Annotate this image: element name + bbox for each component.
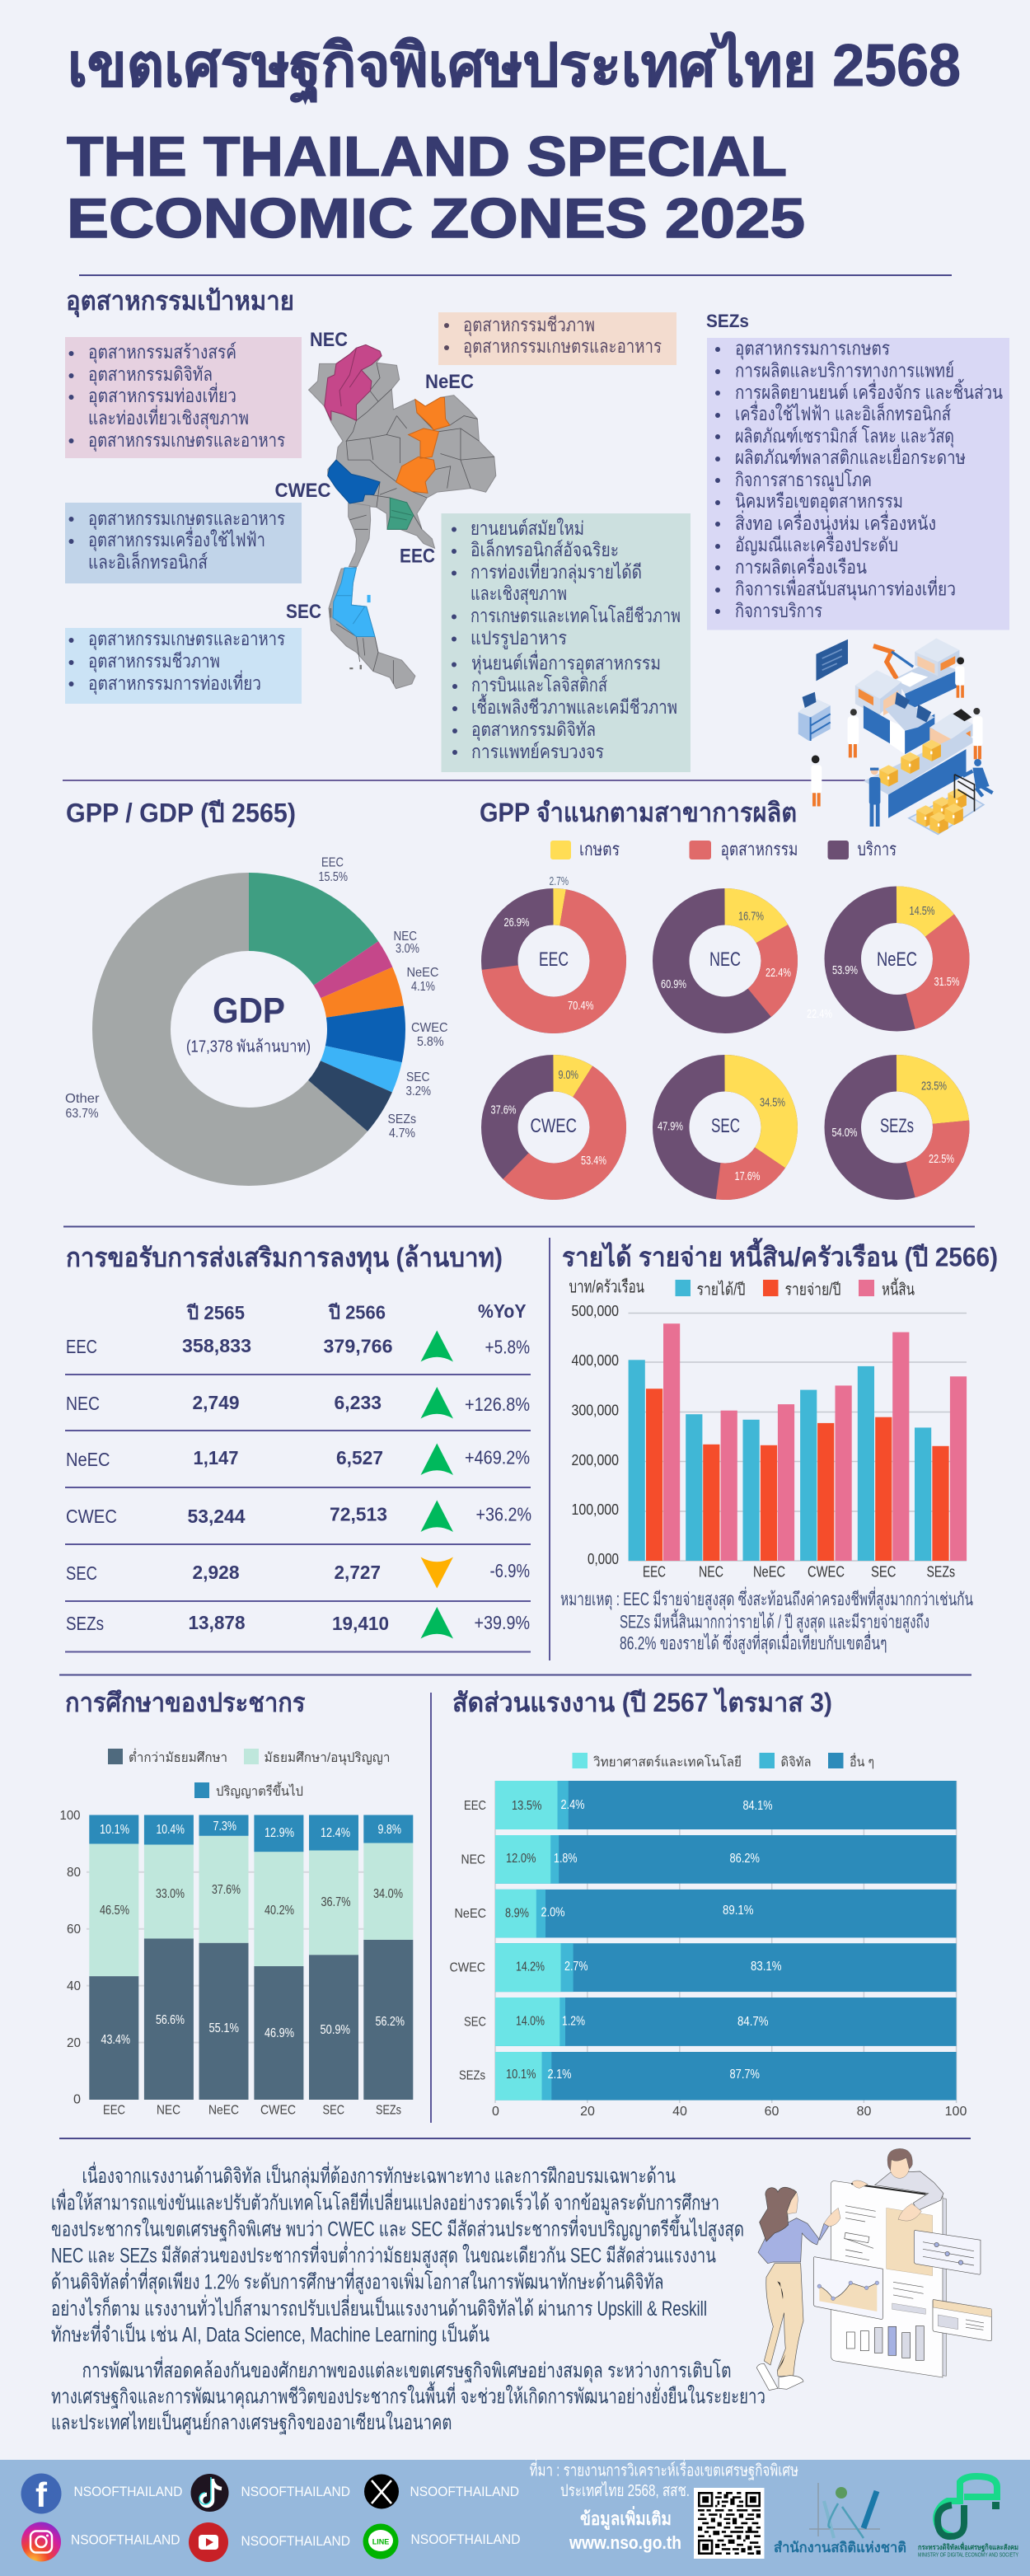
text block: analysis: เนื่องจากแรงงานด้านดิจิทัล เป็นกลุ่มที่ต้องการทักษะเฉพาะทาง และการฝึกอบรมเฉพาะด้าน <box>82 2161 676 2189</box>
chart: household income expense debt: SEC <box>871 1564 897 1581</box>
social label: NSOOFTHAILAND <box>410 2532 521 2547</box>
row: CWEC: CWEC <box>66 1506 117 1527</box>
panel: CWEC industries: อุตสาหกรรมเกษตรและอาหาร <box>88 508 285 530</box>
title: English <box>67 125 805 250</box>
row: SEZs <box>66 1607 530 1638</box>
chart: GDP share donut: Other <box>65 1092 100 1106</box>
chart: education stacked columns: 0 <box>73 2093 81 2106</box>
chart: education stacked columns: 56.6% <box>156 2013 185 2027</box>
chart: EEC sector donut <box>499 874 608 1015</box>
row: NEC: +126.8% <box>465 1393 530 1415</box>
chart: labour share stacked bars: 14.2% <box>516 1960 545 1974</box>
chart: GDP share donut: (17,378 พันล้านบาท) <box>186 1038 311 1056</box>
panel: NEC industries: และท่องเที่ยวเชิงสุขภาพ <box>88 405 249 429</box>
text block: analysis: NEC และ SEZs มีสัดส่วนของประชากรที่จบต่ำกว่ามัธยมสูงสุด ในขณะเดียวกัน SEC มีสัดส่วนแรงงาน <box>51 2241 716 2268</box>
figure: man <box>851 2148 943 2221</box>
chart: labour share stacked bars: CWEC <box>450 1961 485 1974</box>
chart: education stacked columns: NEC <box>157 2103 180 2118</box>
social label: NSOOFTHAILAND <box>410 2484 519 2499</box>
row: SEC: SEC <box>66 1562 97 1584</box>
legend: sectors: อุตสาหกรรม <box>720 839 798 860</box>
chart: education stacked columns: 12.9% <box>265 1826 294 1840</box>
source and more info: ที่มา : รายงานการวิเคราะห์เรื่องเขตเศรษฐกิจพิเศษ <box>529 2459 798 2480</box>
chart: household income expense debt: 500,000 <box>572 1303 619 1319</box>
chart: CWEC sector donut: 9.0% <box>559 1068 578 1082</box>
panel: NEC industries: อุตสาหกรรมเกษตรและอาหาร <box>88 429 285 452</box>
text block: analysis <box>51 2161 765 2435</box>
chart: EEC sector donut: 26.9% <box>504 916 529 930</box>
title: English: ECONOMIC ZONES 2025 <box>67 187 805 250</box>
panel: EEC industries: การท่องเที่ยวกลุ่มรายได้ดี <box>471 559 642 583</box>
row: SEC: 2,727 <box>335 1562 381 1583</box>
heading: education: การศึกษาของประชากร <box>65 1688 305 1717</box>
chart: SEZs sector donut: 23.5% <box>921 1080 947 1093</box>
heading: GPP by sector: GPP จำแนกตามสาขาการผลิต <box>480 798 797 827</box>
panel: SEC industries: อุตสาหกรรมการท่องเที่ยว <box>88 670 261 695</box>
logo: Ministry of Digital Economy and Society <box>918 2476 1018 2558</box>
panel: SEZs industries: สิ่งทอ เครื่องนุ่งห่ม เครื่องหนัง <box>735 510 936 535</box>
chart: labour share stacked bars: 1.2% <box>562 2014 585 2029</box>
chart: GDP share donut: 4.1% <box>411 980 435 994</box>
row: SEC: -6.9% <box>489 1560 530 1581</box>
chart: GDP share donut: 3.0% <box>396 942 419 956</box>
social label: NSOOFTHAILAND <box>71 2532 180 2548</box>
panel: SEC industries: อุตสาหกรรมชีวภาพ <box>88 650 220 672</box>
chart: education stacked columns: CWEC <box>260 2103 296 2118</box>
row: CWEC: 72,513 <box>330 1503 387 1525</box>
row: NEC: NEC <box>66 1393 100 1414</box>
row: SEZs: SEZs <box>66 1613 104 1634</box>
chart: GDP share donut <box>65 855 448 1147</box>
panel: SEZs industries <box>707 338 1009 630</box>
note: household finance <box>560 1586 973 1655</box>
chart: labour share stacked bars: 2.1% <box>547 2068 572 2082</box>
map labels <box>275 329 474 623</box>
row: SEC <box>66 1557 530 1589</box>
chart: CWEC sector donut: 37.6% <box>491 1103 516 1117</box>
chart: labour share stacked bars: 13.5% <box>512 1799 542 1813</box>
table: investment promotion: ปี 2565 <box>185 1302 245 1323</box>
chart: GDP share donut: SEZs <box>387 1112 416 1126</box>
title: Thai: เขตเศรษฐกิจพิเศษประเทศไทย 2568 <box>68 30 961 104</box>
illustration: cart of boxes <box>909 775 984 834</box>
panel: SEZs industries: เครื่องใช้ไฟฟ้า และอิเล็กทรอนิกส์ <box>735 400 951 424</box>
chart: education stacked columns: 40.2% <box>265 1904 294 1918</box>
chart: labour share stacked bars: 1.8% <box>554 1852 577 1866</box>
chart: SEC sector donut <box>658 1073 785 1183</box>
chart: EEC sector donut: 2.7% <box>549 874 569 888</box>
chart: NeEC sector donut: 53.9% <box>832 963 858 977</box>
source and more info: ประเทศไทย 2568, สสช. <box>560 2481 690 2500</box>
panel: SEZs industries: อัญมณีและเครื่องประดับ <box>735 532 898 555</box>
heading: investment promotion: การขอรับการส่งเสริมการลงทุน (ล้านบาท) <box>66 1243 503 1275</box>
row: EEC: EEC <box>66 1336 97 1357</box>
chart: household income expense debt: SEZs <box>926 1564 955 1581</box>
text block: analysis: และประเทศไทยเป็นศูนย์กลางเศรษฐกิจของอาเซียนในอนาคต <box>51 2410 452 2435</box>
chart: GDP share donut: 3.2% <box>405 1084 431 1098</box>
heading: target industries: อุตสาหกรรมเป้าหมาย <box>66 286 294 318</box>
row: NeEC: 6,527 <box>336 1447 383 1468</box>
panel: NEC industries <box>65 337 302 458</box>
chart: SEC sector donut: 34.5% <box>760 1096 785 1109</box>
row: CWEC: 53,244 <box>188 1506 246 1527</box>
chart: CWEC sector donut: CWEC <box>531 1115 577 1137</box>
chart: education stacked columns: 7.3% <box>213 1820 236 1834</box>
legend: education: ปริญญาตรีขึ้นไป <box>216 1782 303 1799</box>
chart: household income expense debt: บาท/ครัวเรือน <box>569 1277 644 1297</box>
icon: LINE <box>363 2523 399 2560</box>
panel: SEC industries: อุตสาหกรรมเกษตรและอาหาร <box>88 628 285 650</box>
illustration: people with dashboard <box>756 2148 991 2391</box>
panel: SEZs industries: กิจการเพื่อสนับสนุนการท่องเที่ยว <box>735 575 956 600</box>
chart: labour share stacked bars: 0 <box>492 2105 499 2119</box>
panel: EEC industries: อุตสาหกรรมดิจิทัล <box>471 719 596 741</box>
footer band <box>0 2460 1030 2576</box>
chart: household income expense debt <box>569 1277 967 1581</box>
chart: GDP share donut: 15.5% <box>318 870 348 884</box>
social label: NSOOFTHAILAND <box>241 2484 350 2499</box>
panel: NeEC industries: อุตสาหกรรมชีวภาพ <box>463 314 595 336</box>
chart: education stacked columns: 50.9% <box>320 2023 350 2037</box>
panel: NEC industries: อุตสาหกรรมสร้างสรค์ <box>88 341 236 363</box>
chart: labour share stacked bars: 40 <box>672 2105 687 2119</box>
panel: NEC industries: อุตสาหกรรมท่องเที่ยว <box>88 382 236 407</box>
chart: labour share stacked bars <box>450 1752 967 2119</box>
chart: household income expense debt: 300,000 <box>572 1403 619 1419</box>
legend: household <box>676 1277 915 1299</box>
row: NeEC: NeEC <box>66 1449 110 1470</box>
row: EEC: +5.8% <box>485 1337 530 1358</box>
panel: SEZs industries: ผลิตภัณฑ์เซรามิกส์ โลหะ และวัสดุ <box>735 425 954 447</box>
panel: SEC industries <box>65 628 302 704</box>
panel: NeEC industries: อุตสาหกรรมเกษตรและอาหาร <box>463 335 662 358</box>
panel: SEZs industries: ผลิตภัณฑ์พลาสติกและเยื่อกระดาษ <box>735 444 966 468</box>
chart: SEZs sector donut: 54.0% <box>832 1126 857 1140</box>
chart: household income expense debt: NeEC <box>753 1564 785 1581</box>
legend: household: หนี้สิน <box>882 1277 915 1299</box>
chart: NeEC sector donut: NeEC <box>877 948 917 971</box>
chart: household income expense debt: 100,000 <box>572 1501 619 1518</box>
chart: NEC sector donut: 60.9% <box>661 977 686 991</box>
chart: NeEC sector donut: 31.5% <box>934 975 959 989</box>
chart: labour share stacked bars: 8.9% <box>505 1907 529 1920</box>
panel: CWEC industries: อุตสาหกรรมเครื่องใช้ไฟฟ้า <box>88 527 265 551</box>
row: CWEC <box>66 1500 531 1532</box>
legend: sectors <box>550 839 897 860</box>
chart: education stacked columns: 43.4% <box>101 2033 130 2047</box>
chart: labour share stacked bars: 10.1% <box>506 2068 536 2082</box>
chart: labour share stacked bars: 100 <box>945 2105 967 2119</box>
chart: labour share stacked bars: 86.2% <box>730 1852 760 1866</box>
chart: household income expense debt: 400,000 <box>572 1352 619 1369</box>
text block: analysis: ทักษะที่จำเป็น เช่น AI, Data Science, Machine Learning เป็นต้น <box>51 2321 489 2347</box>
legend: labour: อื่น ๆ <box>850 1752 874 1770</box>
chart: labour share stacked bars: 12.0% <box>506 1852 536 1866</box>
map: Thailand economic corridors <box>309 344 496 689</box>
map labels: NEC <box>310 329 348 351</box>
legend: labour: วิทยาศาสตร์และเทคโนโลยี <box>593 1754 742 1770</box>
chart: education stacked columns: 55.1% <box>209 2021 239 2035</box>
illustration: isometric factory <box>798 639 993 834</box>
icon: facebook: f <box>35 2475 48 2514</box>
chart: NeEC sector donut <box>832 904 959 1013</box>
chart: labour share stacked bars: 2.7% <box>564 1960 588 1974</box>
row: SEC: 2,928 <box>193 1562 240 1583</box>
chart: GDP share donut: NEC <box>394 930 417 944</box>
panel: CWEC industries <box>65 503 302 583</box>
chart: GDP share donut: EEC <box>321 855 344 870</box>
chart: labour share stacked bars: SEC <box>464 2016 486 2029</box>
chart: NEC sector donut: NEC <box>709 948 741 971</box>
heading: household finance: รายได้ รายจ่าย หนี้สิน/ครัวเรือน (ปี 2566) <box>562 1238 998 1272</box>
source and more info: www.nso.go.th <box>569 2532 681 2553</box>
legend: household: รายได้/ปี <box>697 1281 745 1299</box>
social label: NSOOFTHAILAND <box>241 2533 350 2549</box>
chart: household income expense debt: NEC <box>699 1564 723 1581</box>
icon: instagram <box>21 2522 61 2561</box>
panel: CWEC industries: และอิเล็กทรอนิกส์ <box>88 550 208 573</box>
heading: labour share: สัดส่วนแรงงาน (ปี 2567 ไตรมาส 3) <box>452 1687 832 1717</box>
chart: GDP share donut: SEC <box>406 1070 430 1084</box>
heading: GPP/GDP: GPP / GDP (ปี 2565) <box>66 798 296 827</box>
chart: household income expense debt: 200,000 <box>572 1452 619 1468</box>
panel: NEC industries: อุตสาหกรรมดิจิทัล <box>88 363 213 386</box>
chart: education stacked columns: 40 <box>67 1979 81 1993</box>
chart: education stacked columns: 10.1% <box>100 1823 129 1837</box>
legend: labour <box>572 1752 874 1770</box>
chart: labour share stacked bars: 89.1% <box>723 1904 753 1918</box>
map labels: NeEC <box>425 371 474 393</box>
panel: EEC industries: หุ่นยนต์เพื่อการอุตสาหกรรม <box>471 649 661 674</box>
legend: sectors: เกษตร <box>579 839 620 859</box>
chart: CWEC sector donut: 53.4% <box>581 1154 606 1168</box>
chart: education stacked columns: 60 <box>67 1923 81 1937</box>
row: CWEC: +36.2% <box>476 1503 531 1525</box>
chart: labour share stacked bars: 20 <box>580 2105 595 2119</box>
chart: education stacked columns: 12.4% <box>321 1826 350 1840</box>
chart: EEC sector donut: 70.4% <box>568 999 593 1013</box>
row: NEC <box>66 1387 530 1419</box>
chart: education stacked columns: 100 <box>59 1809 81 1823</box>
stray label: 22.4% <box>807 1007 832 1021</box>
chart: education stacked columns: 37.6% <box>212 1883 241 1897</box>
logo: National Statistical Office: สำนักงานสถิติแห่งชาติ <box>774 2540 906 2555</box>
figure: woman <box>756 2187 840 2391</box>
panel: EEC industries: การเกษตรและเทคโนโลยีชีวภาพ <box>471 605 681 626</box>
logo: National Statistical Office <box>774 2483 906 2555</box>
row: NeEC: +469.2% <box>465 1447 530 1468</box>
panel: NeEC industries <box>438 312 677 365</box>
chart: SEC sector donut: 47.9% <box>658 1119 683 1134</box>
QR code <box>694 2488 765 2559</box>
chart: GDP share donut: 4.7% <box>389 1126 415 1140</box>
legend: education <box>108 1748 391 1799</box>
row: EEC <box>66 1330 530 1361</box>
chart: education stacked columns: 46.5% <box>100 1904 129 1918</box>
legend: labour: ดิจิทัล <box>781 1755 811 1770</box>
panel: EEC industries: การบินและโลจิสติกส์ <box>471 674 607 696</box>
row: NeEC: 1,147 <box>193 1447 239 1468</box>
panel: SEZs industries: กิจการบริการ <box>735 600 822 621</box>
chart: labour share stacked bars: 2.0% <box>541 1905 565 1920</box>
panel: EEC industries: แปรรูปอาหาร <box>471 627 567 649</box>
text block: analysis: อย่างไรก็ตาม แรงงานทั่วไปก็สามารถปรับเปลี่ยนเป็นแรงงานด้านดิจิทัลได้ ผ่านการ Upskill & Reskill <box>51 2294 707 2321</box>
panel: EEC industries: เชื้อเพลิงชีวภาพและเคมีชีวภาพ <box>471 694 677 718</box>
map labels: CWEC <box>275 480 331 502</box>
chart: education stacked columns: SEZs <box>376 2103 401 2118</box>
row: SEZs: +39.9% <box>475 1612 530 1633</box>
panel: EEC industries: ยานยนต์สมัยใหม่ <box>471 518 584 539</box>
chart: education stacked columns: 33.0% <box>156 1887 185 1901</box>
chart: labour share stacked bars: NeEC <box>455 1907 486 1921</box>
chart: labour share stacked bars: EEC <box>464 1799 486 1813</box>
text block: analysis: ด้านดิจิทัลต่ำที่สุดเพียง 1.2% ระดับการศึกษาที่สูงอาจเพิ่มโอกาสในการพัฒนาทักษะด้านดิจิทัล <box>51 2268 664 2294</box>
chart: education stacked columns: 9.8% <box>377 1823 401 1837</box>
legend: sectors: บริการ <box>857 839 897 859</box>
icon: tiktok <box>191 2474 229 2512</box>
text block: analysis: การพัฒนาที่สอดคล้องกันของศักยภาพของแต่ละเขตเศรษฐกิจพิเศษอย่างสมดุล ระหว่างการเติบโต <box>82 2356 732 2383</box>
chart: SEC sector donut: 17.6% <box>735 1169 760 1183</box>
icon: LINE: LINE <box>372 2538 389 2546</box>
chart: labour share stacked bars: NEC <box>461 1852 485 1867</box>
chart: GDP share donut: 63.7% <box>66 1107 99 1121</box>
chart: labour share stacked bars: 84.7% <box>737 2015 768 2029</box>
chart: SEZs sector donut: 22.5% <box>929 1152 954 1166</box>
map labels: EEC <box>400 546 435 567</box>
legend: education: ต่ำกว่ามัธยมศึกษา <box>129 1748 227 1765</box>
panel: SEZs industries: นิคมหรือเขตอุตสาหกรรม <box>735 490 903 513</box>
chart: SEC sector donut: SEC <box>711 1115 740 1137</box>
chart: household income expense debt: EEC <box>643 1564 666 1581</box>
source and more info <box>529 2459 798 2553</box>
table: investment promotion <box>65 1300 531 1651</box>
chart: GDP share donut: NeEC <box>407 966 438 980</box>
chart: labour share stacked bars: SEZs <box>459 2068 485 2083</box>
chart: education stacked columns: 46.9% <box>265 2026 294 2040</box>
chart: education stacked columns <box>59 1748 413 2118</box>
chart: labour share stacked bars: 60 <box>765 2105 780 2119</box>
chart: NeEC sector donut: 14.5% <box>910 904 934 918</box>
chart: household income expense debt: 0,000 <box>588 1551 619 1567</box>
chart: labour share stacked bars: 83.1% <box>751 1960 781 1974</box>
panel: SEZs industries: กิจการสาธารณูปโภค <box>735 469 872 491</box>
chart: education stacked columns: 80 <box>67 1866 81 1880</box>
chart: GDP share donut: GDP <box>213 991 285 1031</box>
row: NEC: 2,749 <box>193 1392 239 1413</box>
icon: facebook <box>21 2474 61 2514</box>
chart: NEC sector donut <box>661 906 791 1015</box>
panel: EEC industries: การแพทย์ครบวงจร <box>471 741 604 762</box>
panel: SEZs industries: อุตสาหกรรมการเกษตร <box>735 338 890 359</box>
table: investment promotion: %YoY <box>478 1300 526 1322</box>
chart: education stacked columns: EEC <box>103 2103 125 2118</box>
chart: SEZs sector donut <box>832 1073 954 1182</box>
icon: X <box>364 2474 399 2508</box>
chart: NEC sector donut: 22.4% <box>765 966 791 980</box>
row: SEZs: 13,878 <box>188 1612 246 1633</box>
chart: education stacked columns: 10.4% <box>157 1823 185 1837</box>
chart: education stacked columns: 56.2% <box>376 2015 405 2029</box>
legend: education: มัธยมศึกษา/อนุปริญญา <box>264 1751 391 1766</box>
panel: SEZs industries: การผลิตและบริการทางการแพทย์ <box>735 359 954 381</box>
chart: GDP share donut: 5.8% <box>417 1035 443 1049</box>
row: NEC: 6,233 <box>335 1392 382 1413</box>
source and more info: ข้อมูลเพิ่มเติม <box>580 2505 672 2531</box>
chart: education stacked columns: NeEC <box>208 2103 239 2118</box>
row: SEZs: 19,410 <box>332 1613 389 1634</box>
chart: CWEC sector donut <box>491 1068 608 1182</box>
row: EEC: 379,766 <box>323 1335 392 1356</box>
social label: NSOOFTHAILAND <box>74 2484 183 2499</box>
chart: education stacked columns: 36.7% <box>321 1895 351 1909</box>
panel: EEC industries: และเชิงสุขภาพ <box>471 583 567 605</box>
icon: youtube <box>189 2522 228 2562</box>
chart: SEZs sector donut: SEZs <box>880 1115 914 1137</box>
legend: household: รายจ่าย/ปี <box>784 1281 840 1299</box>
title: English: THE THAILAND SPECIAL <box>67 125 787 188</box>
chart: EEC sector donut: EEC <box>539 948 569 971</box>
row: NeEC <box>66 1444 530 1475</box>
chart: education stacked columns: 20 <box>67 2036 81 2050</box>
chart: household income expense debt: CWEC <box>808 1564 845 1581</box>
text block: analysis: ของประชากรในเขตเศรษฐกิจพิเศษ พบว่า CWEC และ SEC มีสัดส่วนประชากรที่จบปริญญาตรีขึ้นไปสูงสุด <box>51 2213 744 2241</box>
chart: GDP share donut: CWEC <box>411 1021 448 1035</box>
text block: analysis: ทางเศรษฐกิจและการพัฒนาคุณภาพชีวิตของประชากรในพื้นที่ จะช่วยให้เกิดการพัฒนาอย่างยั่งยืนในระยะยาว <box>51 2382 765 2410</box>
chart: labour share stacked bars: 84.1% <box>743 1799 773 1813</box>
panel: EEC industries <box>442 513 691 772</box>
chart: NEC sector donut: 16.7% <box>738 910 764 923</box>
row: EEC: 358,833 <box>182 1335 251 1356</box>
panel: SEZs industries: การผลิตเครื่องเรือน <box>735 554 867 578</box>
panel: EEC industries: อิเล็กทรอนิกส์อัจฉริยะ <box>471 537 619 560</box>
chart: education stacked columns: 34.0% <box>373 1887 403 1901</box>
chart: labour share stacked bars: 14.0% <box>516 2014 545 2029</box>
chart: labour share stacked bars: 2.4% <box>560 1798 585 1812</box>
label: SEZs: SEZs <box>706 311 749 331</box>
chart: labour share stacked bars: 80 <box>857 2105 872 2119</box>
chart: labour share stacked bars: 87.7% <box>730 2068 760 2082</box>
text block: analysis: เพื่อให้สามารถแข่งขันและปรับตัวกับเทคโนโลยีที่เปลี่ยนแปลงอย่างรวดเร็วได้ จากข้อมูลระดับการศึกษา <box>51 2189 719 2215</box>
chart: education stacked columns: SEC <box>323 2103 344 2118</box>
note: household finance: 86.2% ของรายได้ ซึ่งสูงที่สุดเมื่อเทียบกับเขตอื่นๆ <box>620 1630 887 1655</box>
table: investment promotion: ปี 2566 <box>327 1302 386 1323</box>
map labels: SEC <box>286 601 321 623</box>
